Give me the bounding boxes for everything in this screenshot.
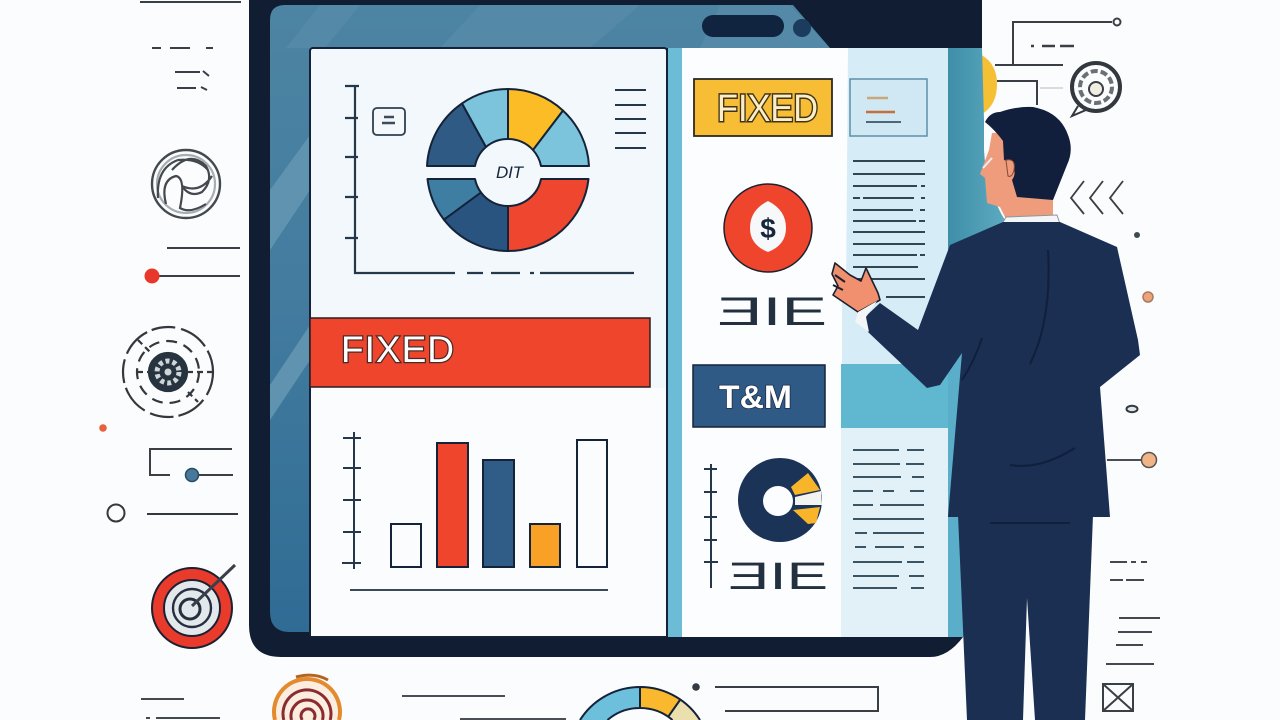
badge: fixed: FIXED [717,88,818,130]
hand [832,263,880,312]
small circle and line [108,504,238,522]
badge: fixed [694,79,832,136]
text lines upper [853,161,925,297]
white column [682,48,852,637]
glasses [983,158,992,168]
glyph label lower: ƎIE [728,556,828,598]
rules lower right [1106,562,1160,664]
bar chart [342,432,608,590]
axis lower [704,464,718,588]
hair [985,107,1071,200]
trousers [958,515,1093,720]
bottom-left rules [141,699,220,718]
panel: t&m [668,48,948,637]
camera dot [793,19,811,37]
small oval [1126,406,1138,412]
status bar pill [702,15,784,37]
jacket [865,222,1140,517]
bottom donut [580,687,700,720]
icon: fingerprint [274,675,340,720]
icon: dollar coin: $ [760,213,776,244]
light block lower [841,428,948,637]
donut chart split [427,89,589,251]
badge: t&m [693,365,825,427]
teal divider strip [668,48,682,637]
bracket with blue dot [150,449,233,482]
small red dot [99,424,107,432]
tablet bezel with glass reflections [270,5,830,635]
line and red dot [144,248,240,284]
top rules [140,2,241,90]
donut chart t&m [738,458,822,542]
bottom decorations [141,675,878,720]
icon: spiral badge [1072,63,1120,116]
lower panel background [311,388,666,636]
connector lines top right [995,18,1120,105]
light blue column [842,48,948,637]
right teal edge [948,48,1006,250]
neck and face [980,130,1053,217]
lower teal edge [945,340,970,637]
figure: businessman [832,107,1140,720]
ear [1006,160,1014,176]
glyph label upper: ƎIE [717,290,827,334]
donut centre label: DIT [496,163,525,182]
panel: fixed [310,48,667,637]
tablet frame [249,0,982,657]
text lines lower [853,450,924,588]
small note card [850,79,927,136]
panel background [310,48,667,637]
orange dot [1143,292,1153,302]
tablet device [249,0,1006,657]
teal block [841,364,948,428]
icon: dollar coin [724,184,812,272]
legend lines [615,90,646,148]
icon: bullseye with arrow [152,565,235,648]
banner: fixed [310,318,650,387]
right decorations [995,18,1160,711]
bottom rules [402,696,566,719]
left decorations [99,2,241,648]
bottom bracket [692,683,878,711]
icon: chevrons [1071,181,1123,214]
shirt cuff [855,301,877,332]
icon: yellow disc behind tablet [975,52,997,114]
collar [1002,215,1060,224]
pie chart axis [345,85,634,273]
icon: swirl [152,150,220,218]
small legend box [373,108,405,135]
line with peach dot [1107,452,1156,468]
badge: t&m: T&M [719,379,792,415]
icon: dashed target [123,327,213,417]
icon: crossed box [1103,684,1133,711]
jacket creases [962,250,1075,523]
small dot [1134,232,1140,238]
banner: fixed: FIXED [341,329,454,370]
